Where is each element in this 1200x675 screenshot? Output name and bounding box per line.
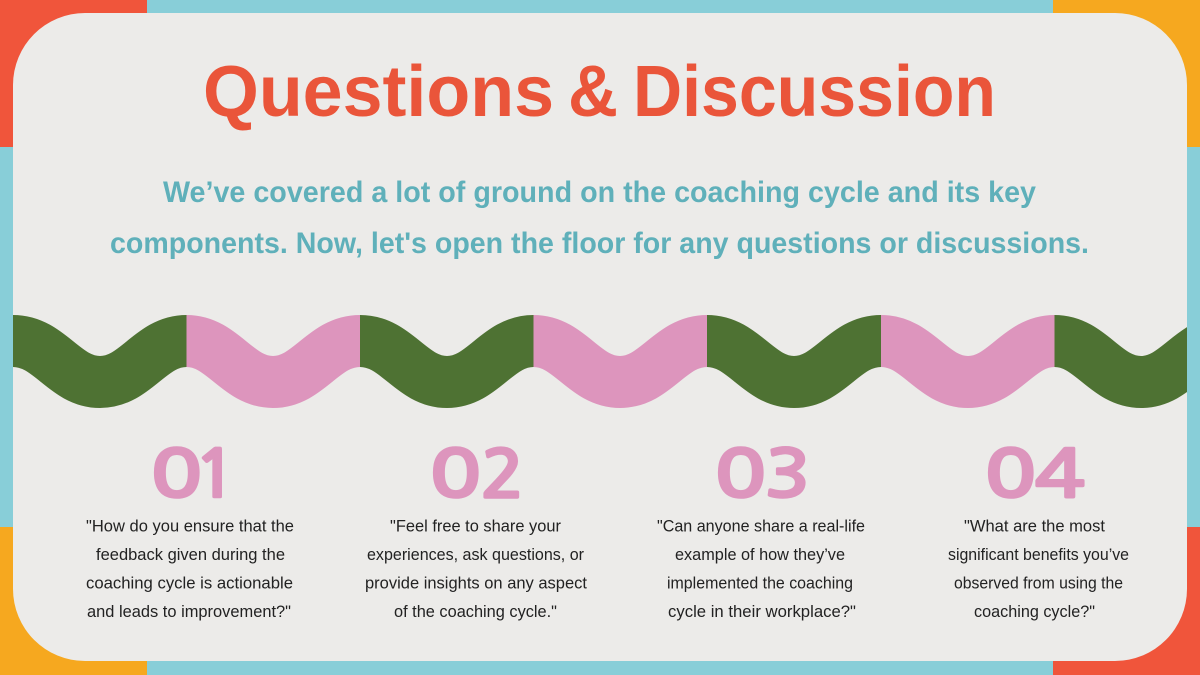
question 3: "Can anyone share a real-life — [657, 518, 865, 536]
column 1 — [86, 442, 294, 621]
question 1: coaching cycle is actionable — [86, 574, 293, 592]
subtitle — [110, 176, 1089, 260]
question 2: experiences, ask questions, or — [367, 546, 584, 564]
question 2: of the coaching cycle." — [394, 603, 557, 621]
column 2 — [365, 442, 587, 621]
wave ribbon — [13, 341, 1200, 382]
number 01: 1 — [193, 442, 238, 508]
question 4: significant benefits you’ve — [948, 546, 1129, 564]
question 1 — [86, 518, 294, 621]
title: Questions — [203, 52, 554, 132]
number 03: 3 — [764, 442, 811, 508]
number 04: 4 — [1034, 442, 1086, 508]
subtitle: We’ve covered a lot of ground on the coaching cycle and its key — [163, 176, 1037, 209]
question 3: example of how they’ve — [675, 546, 845, 564]
question 4: observed from using the — [954, 574, 1123, 592]
question 1: "How do you ensure that the — [86, 518, 294, 536]
title: Discussion — [633, 52, 996, 132]
question 3: implemented the coaching — [667, 574, 853, 592]
number 01: 0 — [150, 442, 203, 508]
question 2 — [365, 518, 587, 621]
question 2: "Feel free to share your — [390, 518, 561, 536]
title: & — [568, 52, 618, 132]
subtitle: components. Now, let's open the floor for any questions or discussions. — [110, 227, 1089, 260]
number 03: 0 — [714, 442, 767, 508]
question 3 — [657, 518, 865, 621]
column 3 — [657, 442, 865, 621]
question 4: "What are the most — [964, 518, 1105, 536]
question 1: feedback given during the — [96, 546, 285, 564]
question 3: cycle in their workplace?" — [668, 603, 856, 621]
question 2: provide insights on any aspect — [365, 574, 587, 592]
number 02: 0 — [429, 442, 482, 508]
question 4: coaching cycle?" — [974, 603, 1095, 621]
number 04: 0 — [984, 442, 1037, 508]
number 02: 2 — [480, 442, 525, 508]
question 1: and leads to improvement?" — [87, 603, 291, 621]
column 4 — [948, 442, 1129, 621]
question 4 — [948, 518, 1129, 621]
